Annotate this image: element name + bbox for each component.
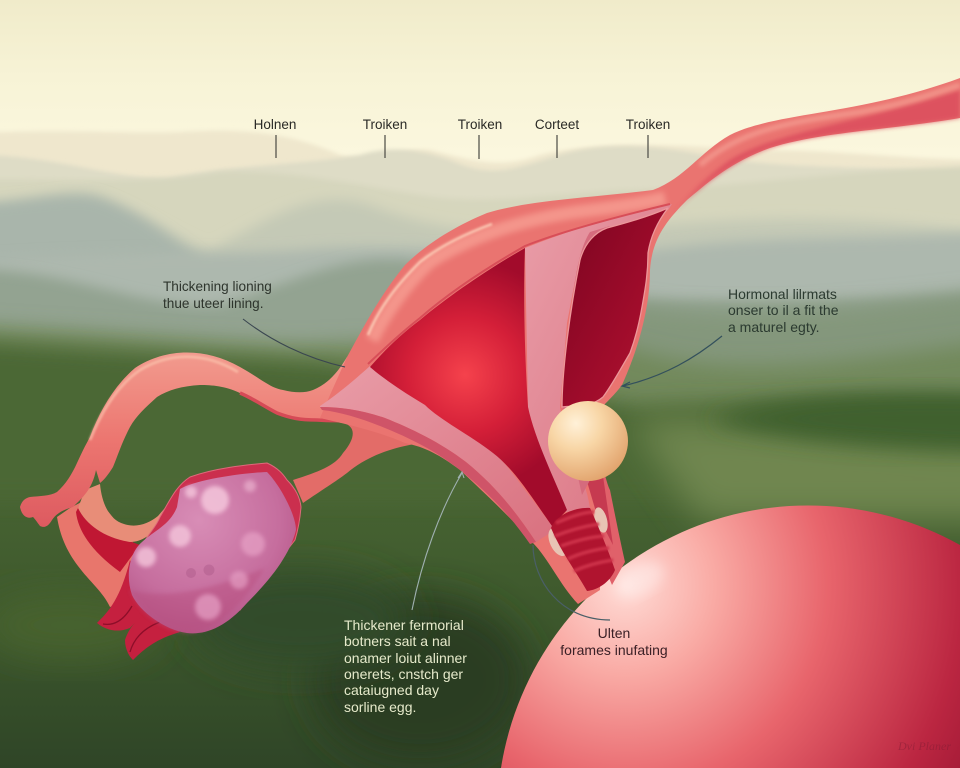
callout: hormonal [622, 286, 839, 388]
top label: Troiken [363, 117, 407, 158]
arrow: ulten [533, 545, 610, 620]
callout: thickening lining: thue uteer lining. [163, 296, 264, 311]
callout: thickener: cataiugned day [344, 682, 439, 698]
callout: thickening lining: Thickening lioning [163, 279, 272, 294]
central pink band [525, 204, 672, 512]
upper edge lines [368, 204, 670, 364]
top label: Troiken: Troiken [363, 117, 407, 132]
tube lower limb behind ovary [57, 484, 170, 607]
cervix [544, 506, 615, 591]
lower pink band [320, 366, 555, 542]
uterus [320, 78, 960, 604]
callout: thickener [344, 472, 467, 715]
band highlight [372, 198, 665, 340]
top label: Holnen: Holnen [254, 117, 296, 132]
callout: thickener: onamer loiut alinner [344, 650, 467, 666]
right chamber [562, 208, 668, 407]
callout: ulten: Ulten [598, 625, 630, 641]
callout: hormonal: onser to il a fit the [728, 302, 839, 318]
signature: Dvi Planer [897, 739, 951, 753]
arrow: hormonal [622, 336, 722, 388]
ovary [97, 463, 301, 660]
callout: hormonal: Hormonal lilrmats [728, 286, 837, 302]
callout: thickener: onerets, cnstch ger [344, 666, 463, 682]
arrow: lining [243, 319, 345, 367]
top label: Troiken 3 [626, 117, 670, 158]
top label: Troiken 2 [458, 117, 502, 159]
top label: Corteet: Corteet [535, 117, 579, 132]
egg [548, 401, 628, 481]
top label: Troiken 3: Troiken [626, 117, 670, 132]
callout: hormonal: a maturel egty. [728, 319, 820, 335]
lower right wall [580, 470, 625, 585]
top label: Troiken 2: Troiken [458, 117, 502, 132]
callout: thickener: sorline egg. [344, 699, 416, 715]
ovary ligament [293, 405, 425, 503]
right tube colouring [675, 90, 960, 212]
callout: thickening lining [163, 279, 345, 367]
left fallopian tube [20, 352, 378, 527]
inner rose wall below egg [586, 476, 613, 545]
callout: ulten [533, 545, 668, 658]
arrow: thickener [412, 472, 464, 610]
big sphere [501, 505, 960, 768]
uterus wall and tube [320, 78, 960, 604]
top label: Corteet [535, 117, 579, 158]
callout: thickener: botners sait a nal [344, 633, 451, 649]
callout: thickener: Thickener fermorial [344, 617, 464, 633]
callout: ulten: forames inufating [560, 642, 668, 658]
top label: Holnen [254, 117, 296, 158]
central cavity [370, 248, 567, 526]
